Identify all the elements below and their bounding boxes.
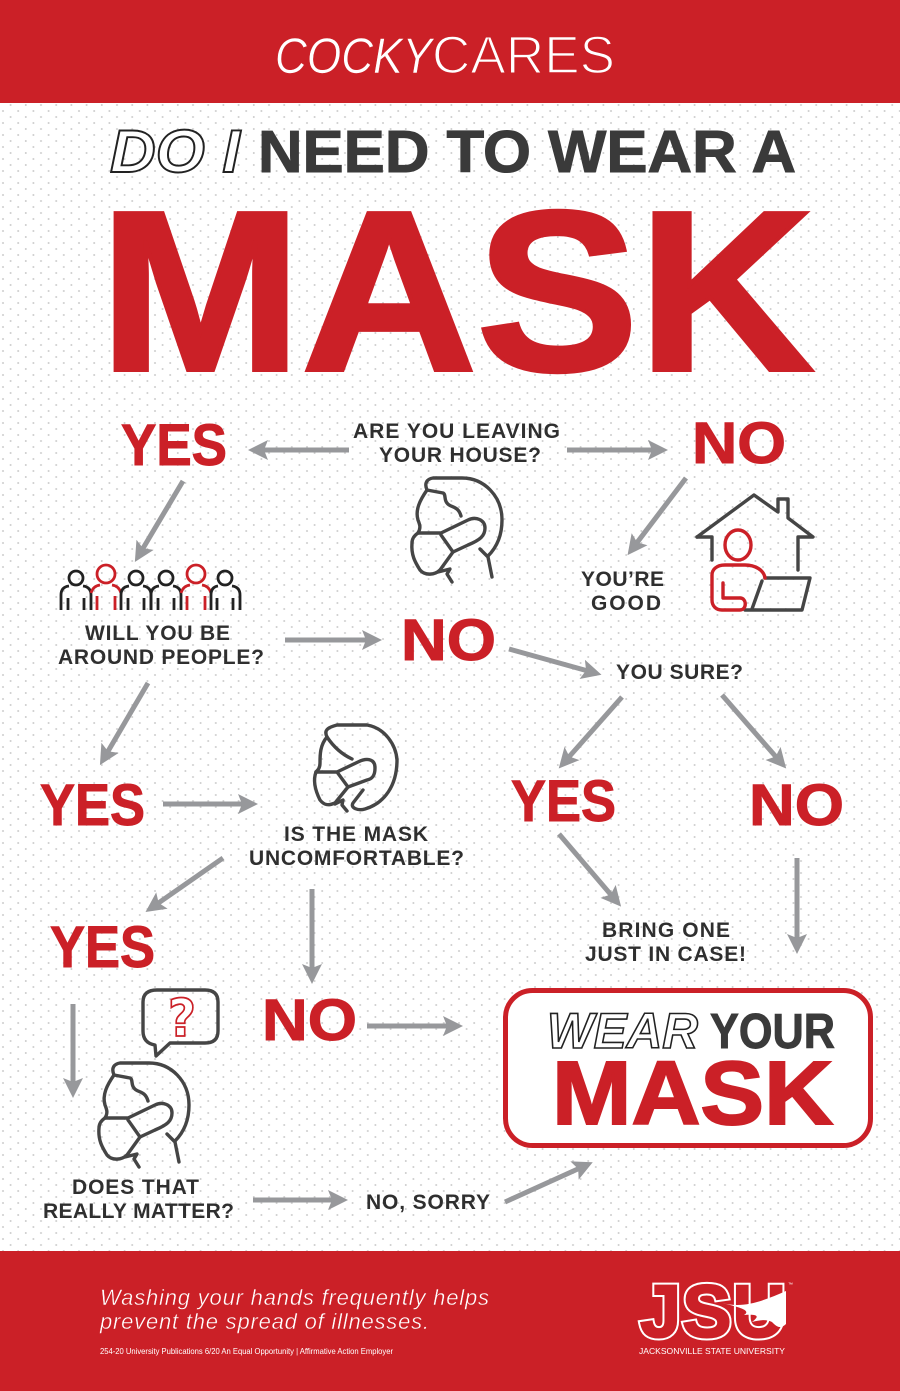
title: MASK (100, 165, 814, 419)
text: bring one just in case: BRING ONE (602, 919, 730, 942)
answer: yes: YES (121, 413, 227, 478)
question: are you leaving your house: ARE YOU LEAVING (353, 420, 560, 443)
callout: wear your mask: YOUR (710, 1005, 835, 1059)
header logotype: Cocky Cares: CARES (432, 26, 615, 85)
arrow (262, 448, 349, 452)
icon: head with mask (412, 478, 502, 582)
arrow (310, 889, 314, 970)
answer: no: NO (749, 773, 844, 838)
icon: group of people (61, 565, 240, 610)
icon: person with laptop in house (697, 495, 813, 610)
answer: yes: YES (511, 769, 616, 834)
answer: no: NO (692, 411, 786, 476)
footer band (0, 1251, 900, 1391)
question: is the mask uncomfortable: IS THE MASK (284, 823, 428, 846)
question: you sure: YOU SURE? (616, 661, 743, 684)
arrow (367, 1024, 449, 1028)
text: you're good: GOOD (591, 592, 661, 615)
arrow (107, 683, 148, 753)
answer: no: NO (262, 988, 357, 1053)
arrow (285, 638, 368, 642)
callout: wear your mask: MASK (552, 1044, 833, 1144)
question: does that really matter: DOES THAT (72, 1176, 199, 1199)
arrow (157, 858, 223, 904)
arrow (142, 481, 183, 550)
answer: yes: YES (50, 915, 155, 980)
footer message: prevent the spread of illnesses. (99, 1309, 429, 1334)
header logotype: Cocky Cares (275, 26, 615, 85)
question: will you be around people: WILL YOU BE (85, 622, 230, 645)
logo: JSU: JSU (640, 1270, 786, 1353)
icon: speech bubble with question mark (143, 989, 218, 1056)
title: NEED TO WEAR A (258, 119, 796, 185)
arrow (509, 649, 588, 671)
text: no, sorry: NO, SORRY (366, 1191, 490, 1214)
icon: head with mask facing left (315, 725, 397, 811)
icon: head with mask (99, 1063, 189, 1167)
question: does that really matter (43, 1176, 234, 1223)
text: you're good: YOU’RE (581, 568, 664, 591)
arrow (559, 834, 612, 896)
callout: wear your mask (506, 990, 870, 1146)
answer: no: NO (401, 608, 496, 673)
arrow (567, 448, 654, 452)
answer: yes: YES (40, 773, 145, 838)
question: are you leaving your house: YOUR HOUSE? (379, 444, 541, 467)
arrow (722, 695, 777, 758)
arrow (794, 858, 800, 940)
callout: wear your mask: WEAR (547, 1003, 698, 1059)
question: will you be around people (58, 622, 264, 669)
question: is the mask uncomfortable: UNCOMFORTABLE? (249, 847, 464, 870)
header logotype: Cocky Cares: COCKY (275, 28, 435, 84)
header band (0, 0, 900, 103)
logo: JSU: JACKSONVILLE STATE UNIVERSITY (639, 1346, 785, 1356)
text: bring one just in case: JUST IN CASE! (585, 943, 746, 966)
logo: JSU: JSU (640, 1270, 786, 1353)
footer message (99, 1285, 489, 1334)
arrow (636, 478, 686, 544)
title: DO I (110, 118, 241, 185)
logo: JSU: ™ (788, 1282, 793, 1288)
text: bring one just in case (585, 919, 746, 966)
text: you're good (581, 568, 664, 615)
arrow (70, 1004, 76, 1084)
question: does that really matter: REALLY MATTER? (43, 1200, 234, 1223)
question: are you leaving your house (353, 420, 560, 467)
arrow (163, 802, 244, 806)
question: is the mask uncomfortable (249, 823, 464, 870)
arrow (568, 697, 622, 758)
footer fine print: 254-20 University Publications 6/20 An Equal Opportunity | Affirmative Action Employer (100, 1346, 393, 1356)
arrow (253, 1198, 334, 1202)
icon: speech bubble with question mark: ? (168, 989, 196, 1049)
question: will you be around people: AROUND PEOPLE? (58, 646, 264, 669)
arrow (505, 1168, 580, 1202)
footer message: Washing your hands frequently helps (100, 1285, 489, 1310)
